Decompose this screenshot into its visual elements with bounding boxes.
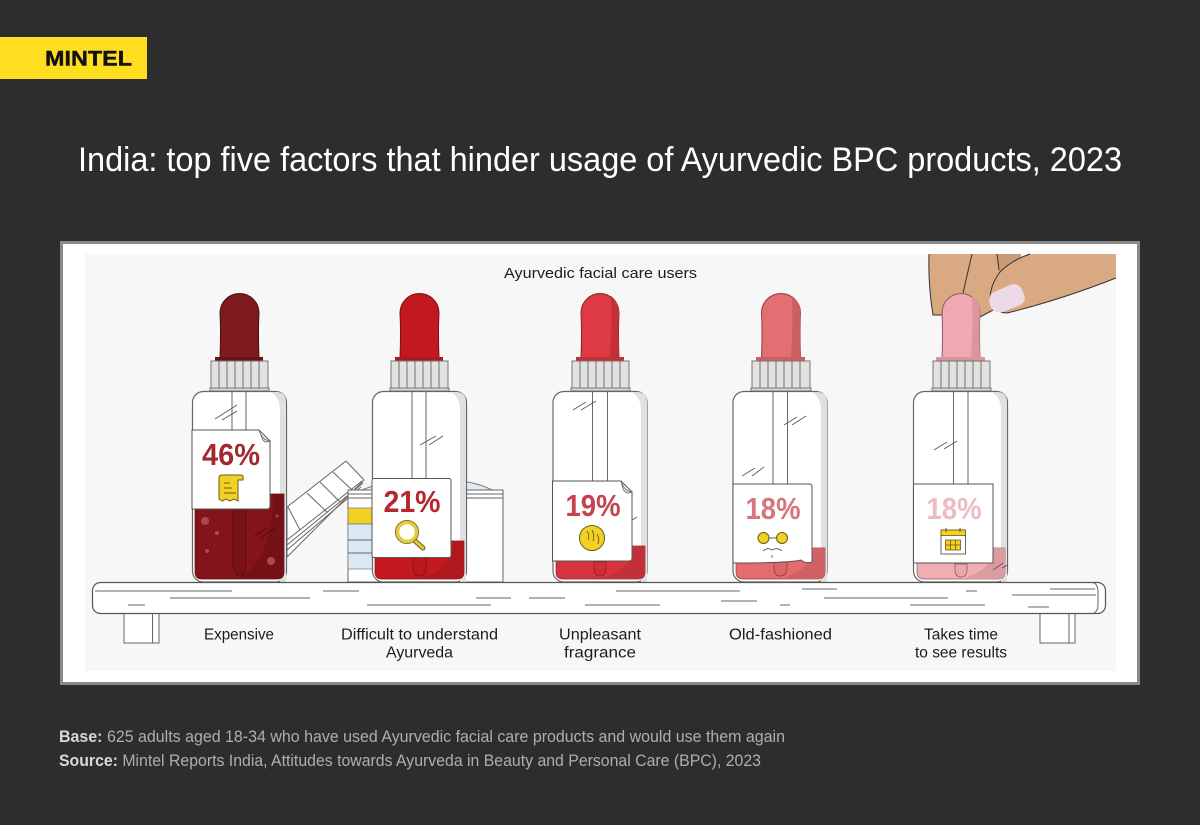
category label: Difficult to understand Ayurveda <box>341 626 498 662</box>
bottle 2: Difficult to understand Ayurveda 21%: 21% <box>384 484 440 519</box>
bottle 3: Unpleasant fragrance 19% <box>552 294 647 582</box>
bottle 5: Takes time to see results 18%: 18% <box>926 491 982 526</box>
category label: Difficult to understand Ayurveda: Difficult to understand <box>341 626 498 644</box>
bottle body <box>914 392 1008 582</box>
chart subtitle: Ayurvedic facial care users <box>504 265 697 282</box>
dropper bulb <box>220 294 259 358</box>
base note: Base: 625 adults aged 18-34 who have used Ayurvedic facial care products and would use them again <box>59 728 785 746</box>
label card <box>733 484 812 563</box>
logo: Mintel <box>0 37 147 79</box>
bottle 1: Expensive 46% <box>192 294 286 582</box>
dropper bulb <box>942 294 980 358</box>
title: India: top five factors that hinder usage of Ayurvedic BPC products, 2023 <box>78 141 1122 179</box>
label card <box>914 484 993 563</box>
liquid <box>736 548 825 579</box>
dropper bulb <box>581 294 619 358</box>
logo: Mintel: MINTEL <box>45 48 132 70</box>
bottle body <box>553 392 647 582</box>
shelf <box>92 582 1106 643</box>
liquid <box>195 494 284 579</box>
bottle 4: Old-fashioned 18%: 18% <box>746 491 800 526</box>
liquid <box>375 541 464 579</box>
label card <box>552 481 632 561</box>
open jar lid <box>287 461 364 557</box>
category label: Takes time to see results: Takes time <box>924 626 998 644</box>
label card <box>192 430 270 509</box>
bottle body <box>372 392 466 582</box>
icon: receipt <box>219 475 243 501</box>
category label: Unpleasant fragrance: fragrance <box>564 644 636 662</box>
category label: Expensive: Expensive <box>204 626 274 644</box>
liquid <box>556 546 645 579</box>
dropper bulb <box>400 294 439 358</box>
bottle body <box>192 392 286 582</box>
dropper cap <box>571 361 630 391</box>
dropper cap <box>932 361 991 391</box>
bottle 5: Takes time to see results 18% <box>914 294 1008 582</box>
dropper cap <box>210 361 269 391</box>
panel: illustration <box>62 242 1138 684</box>
hand holding dropper <box>929 254 1116 317</box>
category label: Unpleasant fragrance <box>559 626 642 662</box>
dropper cap <box>390 361 449 391</box>
category label: Old-fashioned: Old-fashioned <box>729 626 832 644</box>
bottle 2: Difficult to understand Ayurveda 21% <box>372 294 466 582</box>
source note: Source: Mintel Reports India, Attitudes towards Ayurveda in Beauty and Personal Care (BPC), 2023 <box>59 752 761 770</box>
cream jar <box>348 480 503 582</box>
label card <box>372 478 451 558</box>
icon: fragrance <box>580 526 604 550</box>
thumbnail <box>989 284 1025 312</box>
bottle body <box>733 392 827 582</box>
bottle 3: Unpleasant fragrance 19%: 19% <box>566 488 620 523</box>
dropper bulb <box>762 294 800 358</box>
icon: calendar <box>941 528 966 554</box>
icon: magnifier <box>398 522 423 548</box>
icon: glasses and moustache <box>758 532 788 558</box>
category label: Takes time to see results <box>915 626 1007 662</box>
bottle 4: Old-fashioned 18% <box>733 294 827 582</box>
category label: Difficult to understand Ayurveda: Ayurveda <box>386 644 453 662</box>
category label: Unpleasant fragrance: Unpleasant <box>559 626 642 644</box>
dropper cap <box>751 361 811 391</box>
bottle 1: Expensive 46%: 46% <box>202 437 260 472</box>
liquid <box>917 548 1005 579</box>
category label: Takes time to see results: to see results <box>915 644 1007 662</box>
